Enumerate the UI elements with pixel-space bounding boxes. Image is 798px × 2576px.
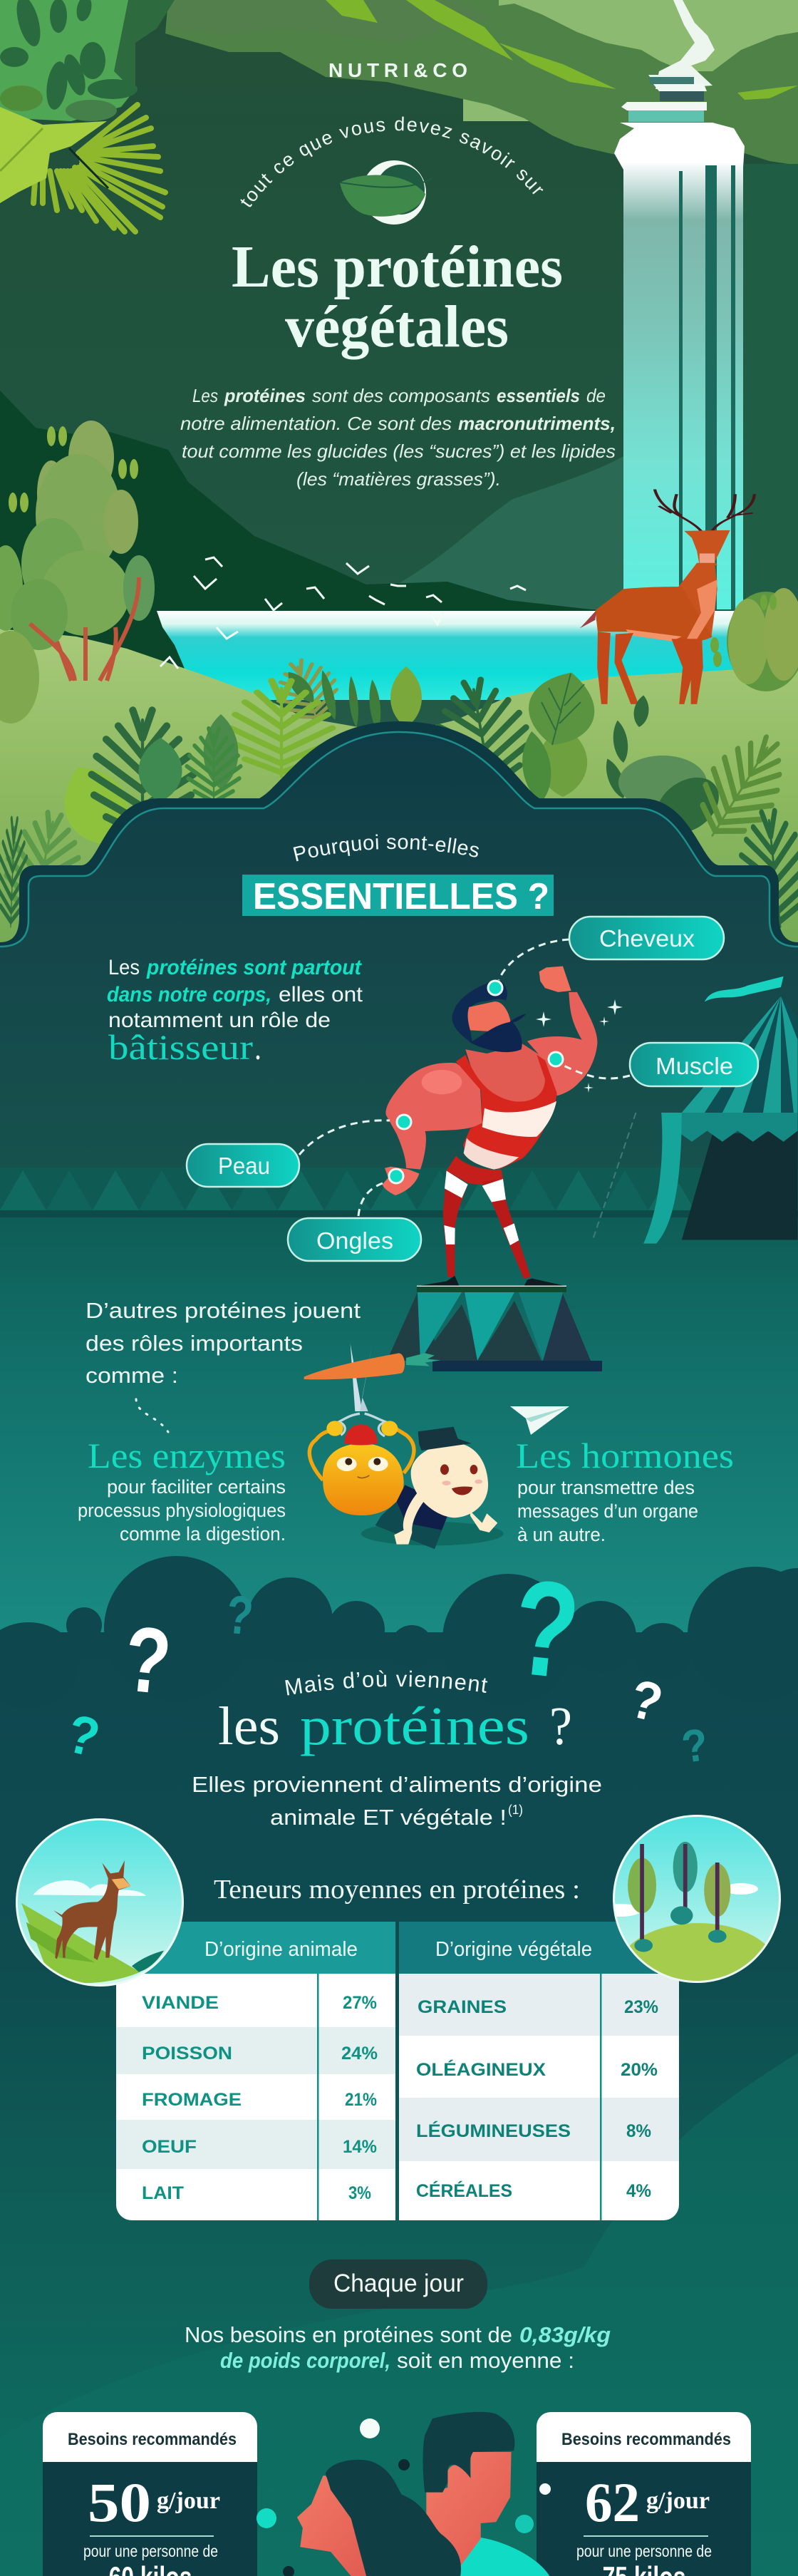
label: Peau: Peau	[218, 1153, 270, 1179]
text: origin sentence: animale ET végétale !	[270, 1805, 507, 1830]
text: bâtisseur paragraph: protéines sont partout	[146, 956, 363, 979]
vegetal rows: GRAINES	[418, 1997, 507, 2017]
decorative dots	[256, 2418, 551, 2576]
enzyme and hormone illustration with carrot	[304, 1344, 504, 1549]
tablet	[375, 1485, 451, 1549]
intro paragraph: sont des composants	[312, 385, 490, 406]
text: origin sentence: (1)	[508, 1803, 523, 1817]
text: origin sentence	[192, 1772, 602, 1830]
bright green ridge streaks	[326, 0, 798, 100]
strongman illustration	[383, 966, 597, 1287]
pill: chaque jour: Chaque jour	[333, 2270, 464, 2297]
text: bâtisseur paragraph: .	[254, 1027, 261, 1067]
vegetal rows: OLÉAGINEUX	[416, 2059, 546, 2080]
table: protein content	[116, 1922, 679, 2220]
card: woman's needs: Besoins recommandés	[68, 2430, 237, 2449]
animal rows: VIANDE	[142, 1993, 219, 2013]
question marks: ?	[678, 1719, 711, 1773]
vegetal rows: 20%	[621, 2060, 658, 2080]
dark cloud bank	[0, 1556, 798, 1708]
card: woman's needs	[43, 2412, 257, 2576]
main title: Les protéines	[232, 234, 563, 300]
top-left tropical foliage	[0, 0, 175, 232]
intro paragraph: de	[586, 385, 606, 406]
intro paragraph: protéines	[224, 385, 306, 406]
card: man's needs: 62	[585, 2471, 640, 2533]
animal rows: FROMAGE	[142, 2090, 242, 2110]
heading: les protéines ?: protéines	[300, 1696, 529, 1756]
waterfall streaks	[679, 171, 683, 609]
animal rows: 27%	[343, 1993, 377, 2013]
callout: body part markers	[299, 939, 630, 1216]
card: woman's needs: 50	[88, 2471, 151, 2533]
animal rows: OEUF	[142, 2137, 197, 2157]
ground hills	[0, 629, 798, 955]
label: Ongles: Ongles	[316, 1227, 393, 1254]
triangle frieze	[0, 1168, 798, 1212]
small leaves	[9, 426, 138, 512]
text: other proteins intro	[86, 1298, 361, 1388]
woman	[297, 2475, 376, 2576]
text: daily needs	[185, 2322, 611, 2373]
circus floor background	[0, 1212, 798, 1654]
pedestal	[387, 1287, 602, 1371]
intro paragraph: tout comme les glucides (les “sucres”) et les lipides	[182, 441, 616, 462]
intro paragraph: notre alimentation. Ce sont des	[180, 413, 452, 434]
scissors	[338, 1344, 386, 1436]
icon: forest medallion	[613, 1815, 781, 1983]
soft wave in lower background	[0, 2053, 798, 2576]
question marks: ?	[507, 1551, 586, 1708]
left shrub tree	[0, 421, 155, 723]
text: origin sentence: Elles proviennent d’aliments d’origine	[192, 1772, 602, 1797]
man	[455, 2538, 549, 2576]
heading banner: essentielles: ESSENTIELLES ?	[253, 876, 549, 917]
heading: les protéines ?	[218, 1696, 572, 1756]
text: bâtisseur paragraph: bâtisseur	[108, 1027, 253, 1067]
carrot	[304, 1353, 440, 1379]
light sky behind mountains	[463, 0, 798, 121]
sparkles	[536, 999, 623, 1093]
egg hormone character	[411, 1443, 488, 1518]
brand logo text: NUTRI&CO	[328, 59, 467, 81]
text: bâtisseur paragraph: notamment un rôle de	[108, 1009, 331, 1032]
table header: D’origine animale	[204, 1938, 358, 1961]
text: les enzymes	[78, 1436, 286, 1545]
foreground jungle plants	[0, 651, 798, 930]
animal rows: 21%	[345, 2090, 377, 2110]
intro paragraph: macronutriments,	[458, 413, 616, 434]
dotted pointer	[136, 1399, 168, 1432]
icon: paper plane	[510, 1406, 569, 1435]
text: other proteins intro: D’autres protéines jouent	[86, 1298, 361, 1323]
text: les enzymes: processus physiologiques	[78, 1500, 286, 1521]
panel: sources section background	[0, 1556, 798, 2576]
illustration: man and woman profiles	[256, 2412, 551, 2576]
text: other proteins intro: des rôles importants	[86, 1331, 303, 1356]
text: daily needs: 0,83g/kg	[519, 2322, 611, 2347]
intro paragraph: (les “matières grasses”).	[296, 468, 501, 490]
question marks: ?	[120, 1606, 176, 1714]
panel: circus section	[0, 721, 798, 1654]
text: les enzymes: pour faciliter certains	[107, 1476, 286, 1498]
table header	[142, 1922, 656, 1974]
vegetal rows: 4%	[626, 2181, 651, 2201]
table header: D’origine végétale	[435, 1938, 592, 1961]
text: bâtisseur paragraph: dans notre corps,	[107, 983, 271, 1006]
tree trunks	[30, 577, 139, 681]
label: Ongles	[288, 1218, 421, 1261]
light ridge band	[168, 0, 492, 43]
heading: les protéines ?: les	[218, 1696, 280, 1756]
text: les hormones: pour transmettre des	[517, 1477, 695, 1498]
arched subtitle: tout ce que vous devez savoir sur	[240, 117, 543, 207]
main title: végétales	[285, 294, 509, 360]
pill: chaque jour	[309, 2260, 487, 2309]
bright lime leaf	[0, 107, 107, 203]
text: les enzymes: comme la digestion.	[120, 1523, 286, 1545]
main title	[232, 234, 563, 360]
label: Cheveux: Cheveux	[599, 925, 695, 952]
right bush	[710, 588, 798, 691]
icon: deer medallion	[14, 1818, 185, 1989]
mountain ridge	[165, 0, 798, 165]
text: bâtisseur paragraph: elles ont	[279, 983, 363, 1006]
darker rock face right of waterfall	[743, 164, 798, 620]
vegetal rows: 8%	[626, 2121, 651, 2141]
dark foreground mountain	[0, 391, 641, 695]
animal rows: 14%	[343, 2137, 377, 2157]
question marks: ?	[223, 1584, 256, 1647]
text: les hormones	[516, 1436, 734, 1545]
question marks: ?	[624, 1668, 668, 1734]
curtain arch outer band	[0, 721, 798, 1176]
card: woman's needs: pour une personne de	[83, 2542, 218, 2560]
animal rows: LAIT	[142, 2183, 184, 2203]
curtain arch inner	[0, 732, 798, 1176]
vegetal rows: 23%	[624, 1997, 658, 2017]
birds	[160, 557, 526, 669]
fog hill behind text	[370, 456, 623, 613]
lake left shore rock	[128, 606, 235, 699]
text: daily needs: de poids corporel,	[220, 2348, 390, 2373]
text: les hormones: messages d’un organe	[517, 1500, 698, 1522]
heading: teneurs moyennes: Teneurs moyennes en protéines :	[214, 1875, 580, 1905]
turquoise lake	[157, 611, 762, 700]
question marks: ?	[61, 1703, 105, 1769]
waterfall	[614, 0, 745, 609]
animal rows: 3%	[348, 2183, 371, 2203]
intro paragraph: Les	[192, 385, 218, 406]
animal rows: 24%	[341, 2044, 378, 2064]
circus tent	[593, 977, 798, 1244]
intro paragraph: essentiels	[497, 385, 580, 406]
vegetal rows: LÉGUMINEUSES	[416, 2121, 571, 2141]
label: Cheveux	[569, 917, 724, 959]
heading: pourquoi: Pourquoi sont-elles	[294, 834, 479, 861]
intro paragraph	[180, 385, 616, 490]
label: Muscle: Muscle	[656, 1053, 733, 1079]
vegetal rows	[416, 1997, 658, 2201]
heading: mais d'où viennent: Mais d’où viennent	[285, 1670, 487, 1695]
question marks	[61, 1551, 711, 1773]
animal rows	[142, 1993, 378, 2203]
text: daily needs: soit en moyenne :	[397, 2348, 574, 2373]
text: bâtisseur paragraph	[107, 956, 363, 1067]
fern frond	[33, 105, 165, 232]
text: other proteins intro: comme :	[86, 1363, 178, 1388]
animal rows: POISSON	[142, 2044, 232, 2064]
panel: forest hero scene	[0, 0, 798, 955]
heading: les protéines ?: ?	[549, 1696, 572, 1756]
text: les hormones: à un autre.	[517, 1524, 606, 1545]
text: bâtisseur paragraph: Les	[108, 956, 140, 979]
table rows	[116, 1974, 679, 2220]
label: Muscle	[630, 1043, 758, 1086]
card: man's needs: Besoins recommandés	[561, 2430, 731, 2449]
card: woman's needs: g/jour	[157, 2488, 220, 2514]
vegetal rows: CÉRÉALES	[416, 2180, 512, 2201]
label: Peau	[187, 1144, 299, 1187]
antlers	[655, 490, 755, 531]
card: man's needs: pour une personne de	[576, 2542, 712, 2560]
stag	[580, 490, 755, 704]
text: les enzymes: Les enzymes	[88, 1436, 286, 1475]
card: man's needs	[537, 2412, 751, 2576]
icon: leaf in crescent	[340, 160, 432, 225]
text: daily needs: Nos besoins en protéines sont de	[185, 2322, 512, 2347]
card: man's needs: g/jour	[646, 2488, 710, 2514]
text: les hormones: Les hormones	[516, 1436, 734, 1475]
